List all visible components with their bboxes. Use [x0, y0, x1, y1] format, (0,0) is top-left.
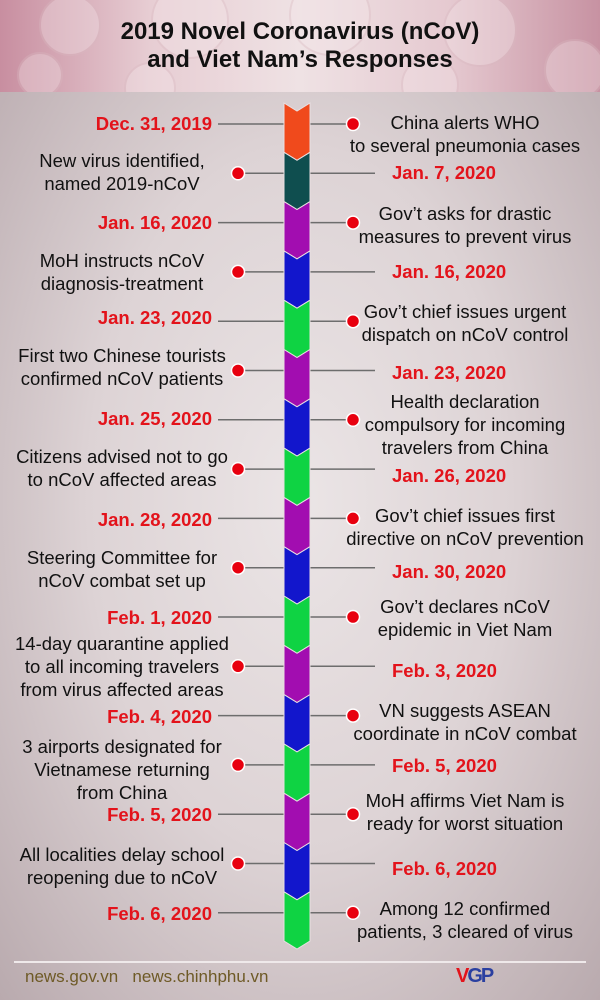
text: Health declaration	[390, 391, 540, 412]
text: Jan. 16, 2020	[98, 212, 212, 233]
text: to nCoV affected areas	[28, 469, 216, 490]
event 9	[98, 505, 584, 549]
event 3	[98, 203, 571, 247]
text: Jan. 16, 2020	[392, 261, 506, 282]
text: VN suggests ASEAN	[379, 700, 551, 721]
text: Steering Committee for	[27, 547, 217, 568]
text: Citizens advised not to go	[16, 446, 228, 467]
text: reopening due to nCoV	[27, 867, 217, 888]
event 11	[107, 596, 552, 640]
text: from virus affected areas	[20, 679, 224, 700]
event 16	[20, 844, 497, 888]
text: MoH affirms Viet Nam is	[366, 790, 564, 811]
text: Jan. 23, 2020	[392, 362, 506, 383]
text: Jan. 26, 2020	[392, 465, 506, 486]
text: dispatch on nCoV control	[362, 324, 568, 345]
text: Feb. 5, 2020	[392, 755, 497, 776]
event 5	[98, 301, 568, 345]
event 12	[15, 633, 497, 700]
text: ready for worst situation	[367, 813, 563, 834]
event 7	[98, 391, 565, 458]
text: confirmed nCoV patients	[21, 368, 223, 389]
text: Gov’t declares nCoV	[380, 596, 550, 617]
event 2	[39, 150, 496, 194]
text: to all incoming travelers	[25, 656, 219, 677]
logo: VGP: VGP	[456, 965, 492, 987]
text: measures to prevent virus	[359, 226, 571, 247]
text: MoH instructs nCoV	[40, 250, 204, 271]
text: directive on nCoV prevention	[346, 528, 584, 549]
text: diagnosis-treatment	[41, 273, 203, 294]
event 8	[16, 446, 506, 490]
text: from China	[77, 782, 167, 803]
event 17	[107, 898, 573, 942]
event 14	[22, 736, 497, 803]
event 1	[96, 112, 580, 156]
text: Feb. 6, 2020	[107, 903, 212, 924]
text: 3 airports designated for	[22, 736, 222, 757]
text: Vietnamese returning	[34, 759, 210, 780]
text: Feb. 4, 2020	[107, 706, 212, 727]
text: Jan. 30, 2020	[392, 561, 506, 582]
text: Gov’t asks for drastic	[379, 203, 551, 224]
event 13	[107, 700, 577, 744]
title: 2019 Novel Coronavirus (nCoV)	[121, 18, 479, 45]
title: and Viet Nam’s Responses	[147, 46, 453, 73]
text: Feb. 5, 2020	[107, 804, 212, 825]
text: compulsory for incoming	[365, 414, 565, 435]
text: Among 12 confirmed	[380, 898, 550, 919]
text: named 2019-nCoV	[44, 173, 200, 194]
text: travelers from China	[382, 437, 548, 458]
event 15	[107, 790, 564, 834]
text: coordinate in nCoV combat	[353, 723, 577, 744]
text: Jan. 28, 2020	[98, 509, 212, 530]
text: Feb. 6, 2020	[392, 858, 497, 879]
text: Gov’t chief issues first	[375, 505, 555, 526]
text: Feb. 3, 2020	[392, 660, 497, 681]
text: Feb. 1, 2020	[107, 607, 212, 628]
text: All localities delay school	[20, 844, 224, 865]
text: China alerts WHO	[390, 112, 540, 133]
text: epidemic in Viet Nam	[378, 619, 552, 640]
title	[121, 18, 479, 73]
event 10	[27, 547, 506, 591]
footer sources: news.gov.vn news.chinhphu.vn	[25, 967, 268, 986]
text: 14-day quarantine applied	[15, 633, 229, 654]
text: New virus identified,	[39, 150, 205, 171]
text: Jan. 7, 2020	[392, 162, 496, 183]
text: Dec. 31, 2019	[96, 113, 212, 134]
text: Jan. 23, 2020	[98, 307, 212, 328]
text: to several pneumonia cases	[350, 135, 580, 156]
event 4	[40, 250, 506, 294]
header banner	[0, 0, 600, 92]
text: patients, 3 cleared of virus	[357, 921, 573, 942]
text: nCoV combat set up	[38, 570, 206, 591]
text: First two Chinese tourists	[18, 345, 226, 366]
event 6	[18, 345, 506, 389]
text: Jan. 25, 2020	[98, 408, 212, 429]
text: Gov’t chief issues urgent	[364, 301, 566, 322]
